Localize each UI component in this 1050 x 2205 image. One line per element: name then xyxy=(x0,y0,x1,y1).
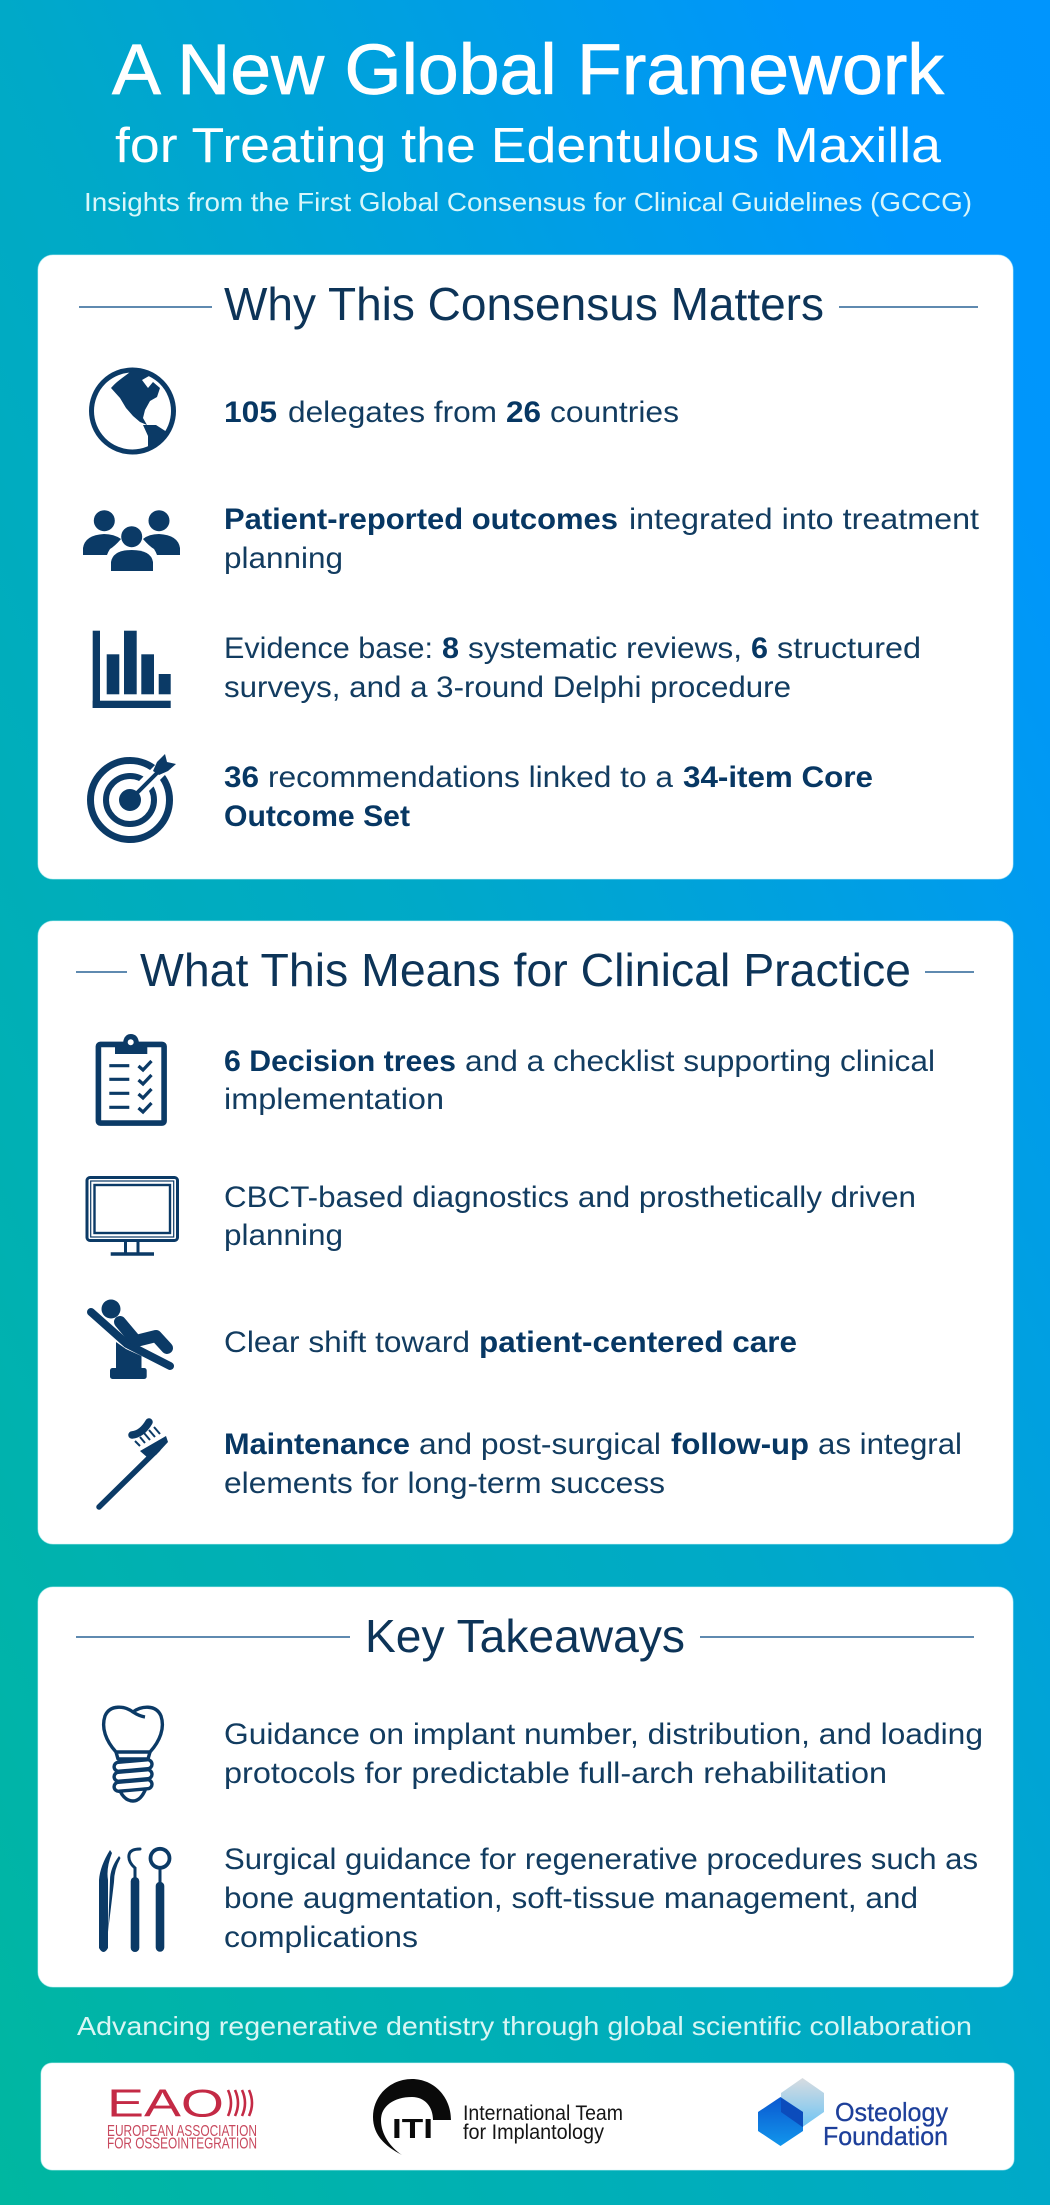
text: patient-centered care: Clear shift toward xyxy=(224,1326,470,1359)
subtitle: for Treating the Edentulous Maxilla xyxy=(115,119,942,173)
text: CBCT diagnostics: CBCT-based diagnostics and prosthetically driven xyxy=(224,1181,916,1214)
text: evidence base: surveys, and a 3-round Delphi procedure xyxy=(224,671,791,704)
logo: ITI xyxy=(373,2079,623,2155)
panel: what this means for clinical practice xyxy=(38,921,1013,1544)
icon: bar chart xyxy=(93,631,171,708)
heading: why this consensus matters: Why This Consensus Matters xyxy=(224,278,824,330)
tagline: Insights from the First Global Consensus for Clinical Guidelines (GCCG) xyxy=(84,187,972,217)
logo: Osteology Foundation: Foundation xyxy=(823,2121,948,2151)
text: maintenance: and post-surgical xyxy=(419,1428,661,1461)
panel: key takeaways xyxy=(38,1587,1013,1987)
text: CBCT diagnostics: planning xyxy=(224,1219,343,1252)
title xyxy=(84,31,972,217)
logo: Osteology Foundation: Osteology xyxy=(835,2097,948,2127)
text: recommendations: 34-item Core xyxy=(683,761,873,794)
text: recommendations: recommendations linked to a xyxy=(268,761,673,794)
text: recommendations xyxy=(224,761,873,833)
panel: why this consensus matters xyxy=(38,255,1013,879)
icon: dental chair xyxy=(91,1300,170,1379)
panel: partner logos xyxy=(41,2063,1014,2170)
text: maintenance: elements for long-term success xyxy=(224,1467,665,1500)
text: maintenance: Maintenance xyxy=(224,1428,410,1461)
text: evidence base: structured xyxy=(777,632,921,665)
text: implant guidance: protocols for predictable full-arch rehabilitation xyxy=(224,1757,887,1790)
logo: EAO xyxy=(107,2082,257,2152)
logo: ITI: International Team xyxy=(463,2102,623,2125)
text: delegates xyxy=(224,396,679,429)
text: surgical guidance: complications xyxy=(224,1921,418,1954)
text: recommendations: Outcome Set xyxy=(224,800,410,833)
text: evidence base: systematic reviews, xyxy=(468,632,742,665)
text: recommendations: 36 xyxy=(224,761,259,794)
logo: ITI: ITI xyxy=(392,2113,433,2144)
icon: dental implant xyxy=(104,1707,162,1801)
text: evidence base: Evidence base: xyxy=(224,632,433,665)
text: implant guidance xyxy=(224,1718,983,1790)
text: maintenance xyxy=(224,1428,962,1500)
text: patient-centered care: patient-centered care xyxy=(479,1326,797,1359)
heading: clinical practice: What This Means for Clinical Practice xyxy=(140,944,911,996)
text: evidence base: 6 xyxy=(751,632,768,665)
logo: EAO: FOR OSSEOINTEGRATION xyxy=(107,2136,257,2152)
text: surgical guidance: Surgical guidance for regenerative procedures such as xyxy=(224,1843,978,1876)
text: decision trees: implementation xyxy=(224,1083,444,1116)
text: maintenance: as integral xyxy=(818,1428,962,1461)
text: decision trees: and a checklist supporting clinical xyxy=(465,1045,935,1078)
text: evidence base xyxy=(224,632,921,704)
text: implant guidance: Guidance on implant number, distribution, and loading xyxy=(224,1718,983,1751)
logo: EAO: EUROPEAN ASSOCIATION xyxy=(107,2123,257,2140)
text: patient-reported outcomes xyxy=(224,503,980,575)
icon: people xyxy=(83,510,180,571)
closing statement: Advancing regenerative dentistry through global scientific collaboration xyxy=(77,2011,972,2041)
logo: EAO: EAO xyxy=(107,2082,224,2126)
text: evidence base: 8 xyxy=(442,632,459,665)
icon: globe xyxy=(92,369,174,456)
text: CBCT diagnostics xyxy=(224,1181,916,1252)
icon: dental instruments xyxy=(99,1849,170,1952)
text: decision trees xyxy=(224,1045,935,1116)
logo: Osteology Foundation xyxy=(758,2078,948,2151)
text: surgical guidance xyxy=(224,1843,978,1954)
text: delegates: 26 xyxy=(506,396,541,429)
logo: ITI: for Implantology xyxy=(463,2121,604,2144)
icon: toothbrush xyxy=(99,1422,168,1507)
icon: target xyxy=(90,752,178,840)
text: patient-reported outcomes: Patient-reported outcomes xyxy=(224,503,618,536)
text: decision trees: 6 Decision trees xyxy=(224,1045,456,1078)
text: patient-reported outcomes: integrated into treatment xyxy=(629,503,980,536)
text: surgical guidance: bone augmentation, soft-tissue management, and xyxy=(224,1882,918,1915)
icon: clipboard checklist xyxy=(98,1034,164,1123)
title: A New Global Framework xyxy=(112,31,945,110)
text: delegates: countries xyxy=(550,396,679,429)
text: delegates: 105 xyxy=(224,396,277,429)
text: patient-reported outcomes: planning xyxy=(224,542,343,575)
text: delegates: delegates from xyxy=(288,396,497,429)
heading: key takeaways: Key Takeaways xyxy=(365,1610,685,1662)
icon: monitor xyxy=(87,1178,178,1254)
text: patient-centered care xyxy=(224,1326,797,1359)
text: maintenance: follow-up xyxy=(671,1428,809,1461)
